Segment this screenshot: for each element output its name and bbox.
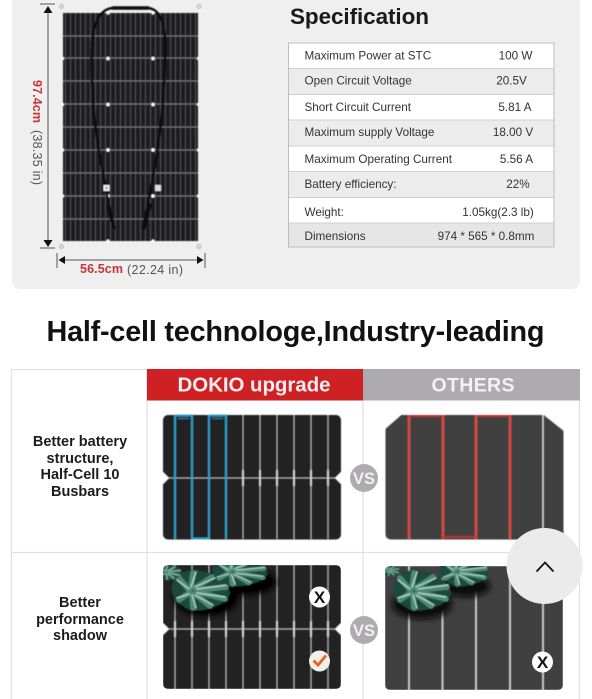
OTHERS panel with red highlights	[385, 415, 564, 540]
title: Half-cell technologe,Industry-leading	[46, 316, 544, 348]
header: OTHERS	[363, 369, 580, 400]
cables	[91, 8, 165, 228]
OTHERS panel with leaf shadow	[382, 556, 563, 690]
blue cell outlines	[175, 415, 226, 539]
comparison table	[11, 369, 580, 699]
VS badge row 1	[350, 464, 378, 492]
specification table: Dimensions	[304, 230, 366, 243]
icon: check mark	[309, 650, 330, 672]
height dimension label	[30, 80, 44, 185]
scroll to top button	[506, 528, 582, 604]
icon: X mark: X	[537, 653, 549, 672]
specification table: Open Circuit Voltage	[304, 74, 412, 88]
row label: better battery structure	[33, 434, 127, 500]
red cell outlines	[409, 415, 510, 539]
header: DOKIO upgrade: DOKIO upgrade	[178, 374, 330, 396]
header: DOKIO upgrade	[147, 369, 363, 400]
specification table: 22%	[506, 178, 530, 191]
monstera leaves	[172, 570, 230, 611]
specification table: Maximum Operating Current	[304, 153, 453, 166]
width dimension label: 56.5cm	[80, 262, 123, 276]
specification table: Short Circuit Current	[304, 101, 412, 114]
height dimension label: 97.4cm	[30, 80, 44, 123]
panel: product and specification	[12, 0, 580, 289]
row label: better battery structure: structure,	[47, 451, 113, 467]
height dimension arrow	[40, 4, 55, 248]
specification table: Weight:	[304, 206, 344, 219]
specification table: 100 W	[499, 50, 532, 62]
DOKIO panel with leaf shadow	[158, 556, 341, 689]
VS badge row 1: VS	[353, 470, 375, 488]
row label: better performance shadow: Better	[59, 595, 101, 611]
row label: better performance shadow: shadow	[53, 628, 108, 644]
row label: better battery structure: Half-Cell 10	[41, 467, 119, 483]
specification table	[288, 43, 554, 247]
VS badge row 2	[350, 616, 378, 644]
specification table: 1.05kg(2.3 lb)	[462, 206, 534, 219]
leaf shadows	[174, 569, 276, 616]
DOKIO half-cell panel with blue highlights	[163, 415, 341, 540]
specification table: 20.5V	[496, 74, 527, 88]
solar panel photo	[60, 5, 201, 248]
header: OTHERS: OTHERS	[432, 374, 514, 396]
specification table: 974 * 565 * 0.8mm	[438, 230, 534, 243]
height dimension label: (38.35 in)	[30, 130, 44, 185]
icon: X mark: X	[314, 588, 326, 607]
width dimension inches: (22.24 in)	[127, 263, 183, 277]
row label: better battery structure: Busbars	[51, 484, 109, 500]
monstera leaves	[393, 570, 451, 611]
specification table: Battery efficiency:	[304, 178, 397, 191]
row label: better battery structure: Better battery	[33, 434, 127, 450]
heading: specification: Specification	[290, 4, 429, 29]
icon: X mark	[309, 586, 330, 608]
VS badge row 2: VS	[353, 622, 375, 640]
width dimension arrow	[57, 253, 205, 268]
specification table: 5.81 A	[498, 101, 532, 114]
specification table: Maximum supply Voltage	[304, 126, 434, 139]
specification table: Maximum Power at STC	[304, 50, 431, 62]
row label: better performance shadow	[36, 595, 124, 644]
row label: better performance shadow: performance	[36, 612, 124, 628]
specification table: 18.00 V	[493, 126, 533, 139]
leaf shadows	[392, 575, 490, 619]
icon: X mark	[532, 652, 553, 672]
specification table: 5.56 A	[500, 153, 533, 166]
